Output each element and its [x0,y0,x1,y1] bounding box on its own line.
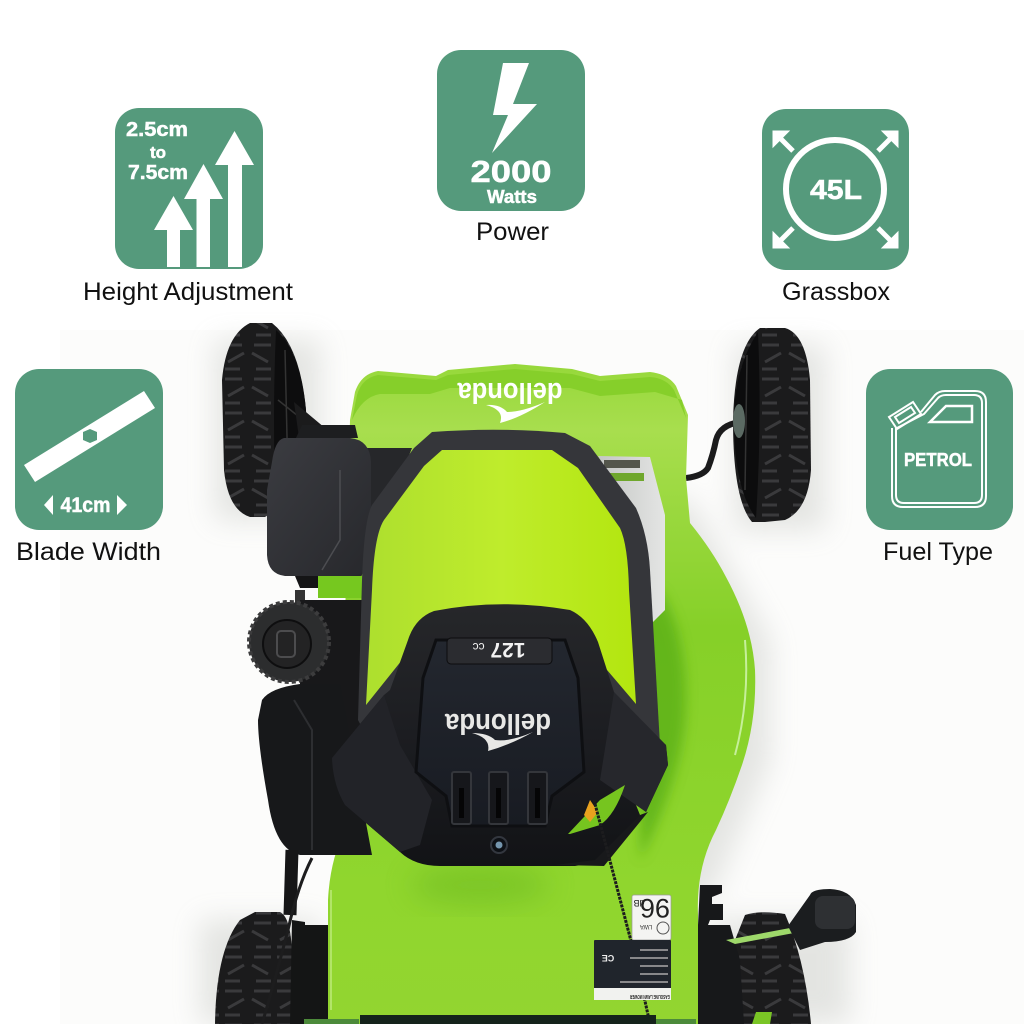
capacity plate [447,638,552,664]
height range text [126,119,188,184]
rating plate: CE [602,953,614,963]
badge [15,369,163,530]
fuel tank [258,684,372,855]
axle arm: right [686,422,740,478]
rear bar [304,1012,772,1024]
badge [437,50,585,211]
width value: 41cm [60,494,110,517]
throttle gap [555,785,648,866]
vent openings [459,788,540,818]
icon: blade [24,391,155,482]
panel: grassbox [762,109,909,306]
filter box [267,425,412,604]
noise label [632,893,671,940]
engine housing [332,604,668,866]
engine body [300,600,368,760]
noise label: dB [633,898,645,908]
label: Blade Width [16,538,161,566]
left cable [262,858,312,1024]
rear bracket [698,885,744,1024]
label: Grassbox [782,278,891,306]
axle hub: right [733,404,745,438]
badge [866,369,1013,530]
fuel value: PETROL [904,450,972,470]
centre panel [416,640,584,826]
badge [762,109,909,270]
mower shadow [200,340,850,1024]
logo: housing [444,707,551,751]
label: Fuel Type [883,538,993,566]
icon: blade hole [83,429,97,443]
vent slots [452,772,547,824]
height lever [726,889,856,950]
panel: power [437,50,585,246]
noise label: LWA [640,923,652,929]
rating plate [594,940,671,1000]
rating plate: GASOLINE LAWN MOWER [630,993,670,999]
panel: height adjustment [83,108,293,306]
label: Height Adjustment [83,278,293,306]
icon: canister [889,391,986,507]
noise label: 96 [640,893,670,923]
axle hub: left [294,402,325,445]
silver guard [598,456,665,625]
icon: expansion arrows [773,131,898,248]
capacity plate: 127 cc [473,638,525,661]
icon: lightning bolt [492,63,537,153]
mower photo [215,323,856,1024]
logo: housing: dellonda [444,707,551,739]
wheel: bottom right [735,912,811,1024]
left tube [290,850,292,915]
fuel cap [249,602,329,682]
logo: deck [457,376,562,423]
panel: blade width [15,369,163,566]
capacity value: 45L [810,174,862,205]
screw [491,837,507,853]
icon: arrows [154,131,254,267]
power value: 2000 [470,154,552,189]
badge [115,108,263,269]
wheel: top left [222,323,306,517]
power unit: Watts [487,187,537,207]
hood top [366,450,636,705]
height range text: to [150,143,166,162]
starter cord [594,800,650,1024]
hood frame [358,430,660,800]
height range text: 7.5cm [128,162,188,184]
width arrows [44,495,127,515]
height range text: 2.5cm [126,119,188,141]
left bracket [290,920,328,1024]
deck [328,364,755,1024]
icon: circle [786,140,884,238]
logo: deck: dellonda [457,376,562,408]
wheel: bottom left [215,912,292,1024]
label: Power [476,218,549,246]
wheel: top right [733,328,811,522]
panel: fuel type [866,369,1013,566]
